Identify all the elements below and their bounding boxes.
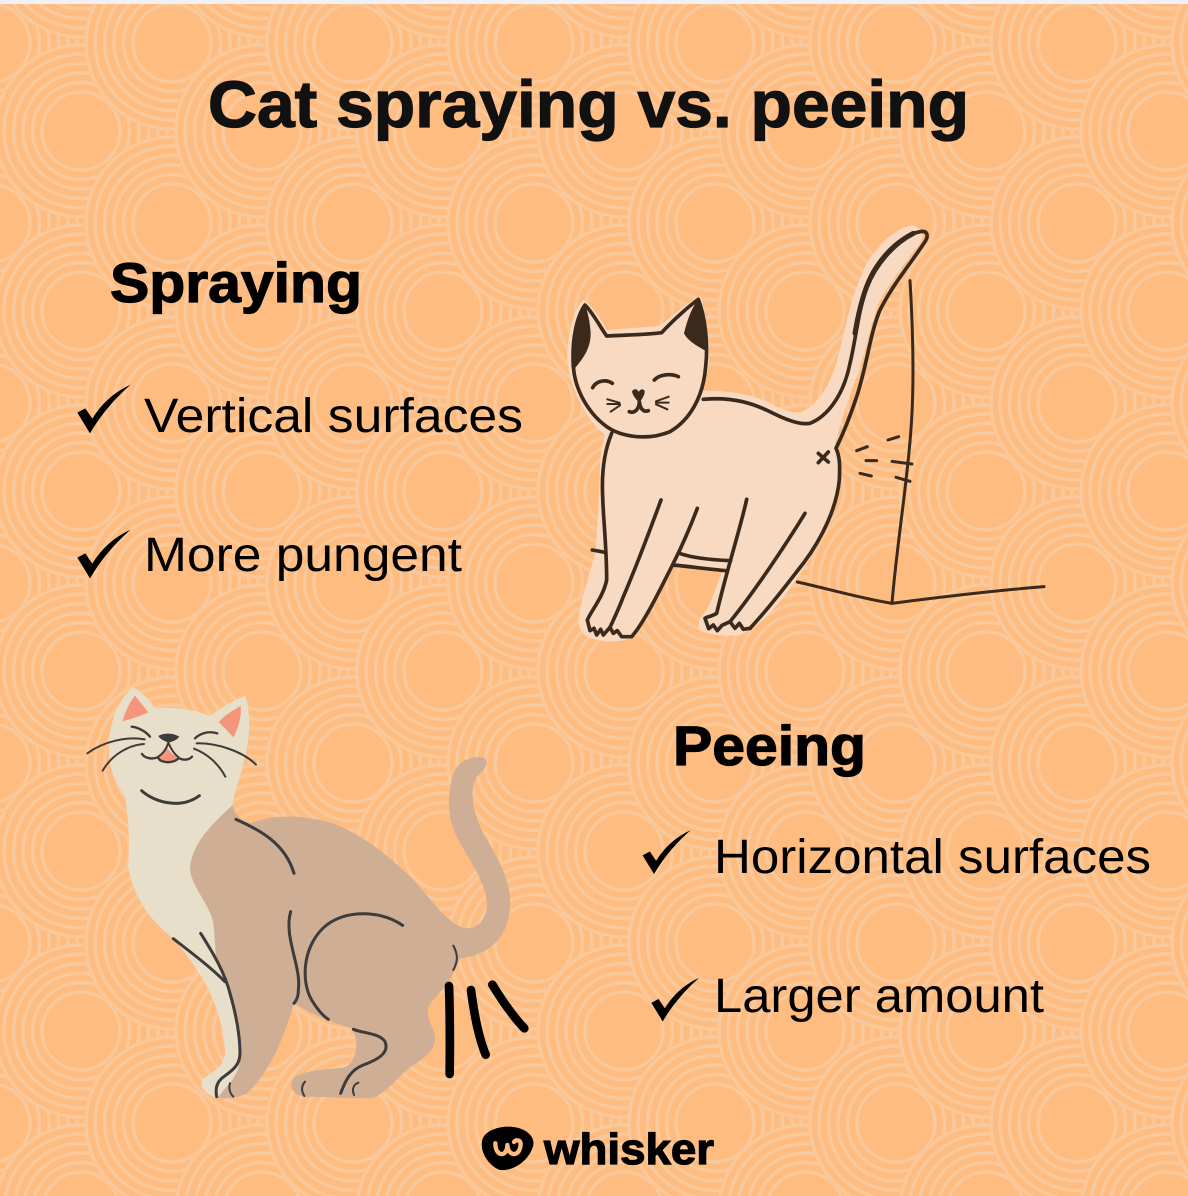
cat ear patches	[572, 299, 708, 403]
title: Cat spraying vs. peeing	[208, 67, 969, 141]
cat ears inner	[123, 696, 241, 761]
text: horizontal surfaces: Horizontal surfaces	[714, 831, 1151, 884]
icon: check vertical surfaces	[77, 385, 131, 433]
logo: whisker	[482, 1125, 714, 1174]
pee stream lines	[449, 985, 524, 1074]
illustration: cat spraying wall	[567, 225, 1044, 642]
illustration: cat peeing	[87, 687, 524, 1098]
text: whisker wordmark: whisker	[543, 1125, 714, 1174]
cat nose	[158, 734, 179, 743]
icon: check more pungent	[77, 530, 131, 578]
cat cream head and chest	[109, 687, 249, 1098]
text: vertical surfaces: Vertical surfaces	[144, 390, 523, 443]
heading: spraying: Spraying	[110, 251, 362, 314]
icon: whisker logo mark	[482, 1127, 533, 1170]
text: larger amount: Larger amount	[714, 970, 1044, 1023]
cat tan body and tail	[190, 757, 510, 1098]
heading: peeing: Peeing	[673, 714, 866, 777]
text: more pungent: More pungent	[144, 529, 462, 582]
icon: check larger amount	[651, 978, 699, 1022]
cat silhouette fill	[567, 225, 922, 642]
cat face and body lines	[87, 727, 457, 1097]
icon: check horizontal surfaces	[643, 830, 691, 874]
cat outlines	[573, 231, 927, 637]
wall and floor lines	[797, 281, 1044, 603]
panel: peeing	[643, 714, 1151, 1023]
panel: spraying	[77, 251, 523, 582]
